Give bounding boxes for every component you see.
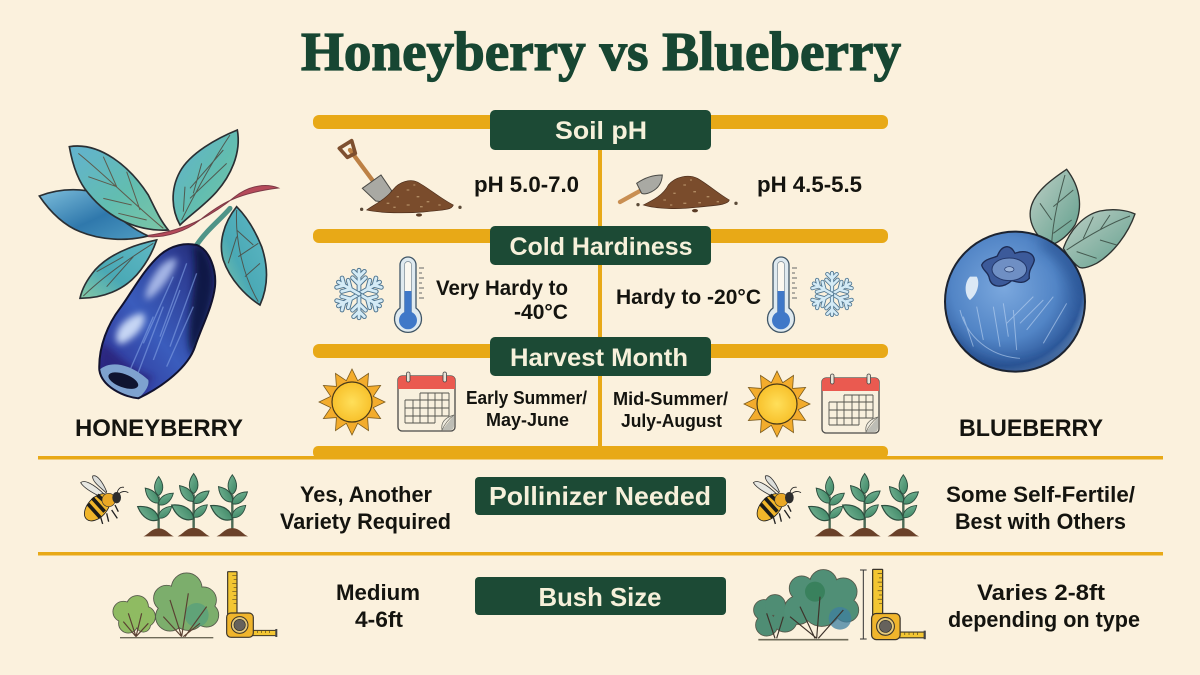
- section header: Harvest Month: Harvest Month: [510, 344, 688, 372]
- icon: bee, blueberry: [752, 476, 801, 526]
- text: blueberry cold hardiness: Hardy to -20°C: [616, 286, 761, 309]
- comparison table centre spine: [598, 150, 602, 448]
- icon: three plants, honeyberry: [135, 474, 250, 536]
- text: honeyberry soil pH: pH 5.0-7.0: [474, 172, 579, 197]
- text: blueberry bush size: depending on type: [948, 607, 1140, 632]
- text: honeyberry bush size: 4-6ft: [355, 607, 404, 632]
- stem: [197, 208, 230, 245]
- icon: calendar, blueberry: [822, 374, 879, 433]
- text: honeyberry cold hardiness: [436, 277, 568, 324]
- icon: trowel and soil, blueberry: [620, 175, 738, 212]
- text: honeyberry pollinizer: [280, 482, 451, 534]
- section header: Soil pH: Soil pH: [555, 117, 647, 145]
- icon: calendar, honeyberry: [398, 372, 455, 431]
- text: blueberry pollinizer: Best with Others: [955, 509, 1126, 534]
- icon: snowflake, blueberry: [811, 273, 853, 315]
- leaf: lower: [80, 240, 157, 298]
- leaf: right: [221, 207, 266, 305]
- illustration: honeyberry fruit with leaves: [39, 130, 278, 400]
- illustration: blueberry with leaves: [943, 169, 1135, 377]
- text: blueberry pollinizer: [946, 482, 1135, 534]
- fruit: [97, 244, 215, 400]
- icon: bushes, honeyberry: [113, 573, 218, 638]
- text: blueberry harvest month: Mid-Summer/: [613, 389, 728, 409]
- icon: thermometer, honeyberry: [394, 257, 424, 332]
- title: Honeyberry vs Blueberry: [301, 21, 901, 82]
- section header: Soil pH: [313, 110, 888, 150]
- leaf: upper left teal: [69, 146, 168, 230]
- icon: bushes, blueberry: [754, 570, 867, 640]
- text: honeyberry cold hardiness: -40°C: [514, 301, 568, 324]
- leaves: [1030, 169, 1080, 245]
- icon: snowflake, honeyberry: [335, 270, 383, 318]
- text: honeyberry pollinizer: Yes, Another: [300, 482, 432, 507]
- section header: Pollinizer Needed: [475, 477, 726, 515]
- text: blueberry bush size: [948, 580, 1140, 632]
- text: honeyberry bush size: [336, 580, 420, 632]
- label: honeyberry: HONEYBERRY: [75, 415, 243, 442]
- text: honeyberry harvest month: [466, 388, 587, 430]
- text: blueberry harvest month: July-August: [621, 411, 722, 431]
- section header: Pollinizer Needed: Pollinizer Needed: [489, 481, 711, 511]
- fruit highlights: [146, 258, 177, 300]
- text: honeyberry harvest month: May-June: [486, 410, 569, 430]
- section header: Bush Size: [475, 577, 726, 615]
- icon: tape measure, honeyberry: [227, 572, 277, 637]
- text: honeyberry cold hardiness: Very Hardy to: [436, 277, 568, 300]
- table bottom bar: [313, 446, 888, 458]
- icon: thermometer, blueberry: [768, 257, 797, 332]
- label: blueberry: BLUEBERRY: [959, 415, 1103, 442]
- icon: bee, honeyberry: [79, 476, 128, 526]
- text: blueberry soil pH: pH 4.5-5.5: [757, 172, 862, 197]
- section header: Cold Hardiness: [313, 226, 888, 265]
- section header: Cold Hardiness: Cold Hardiness: [510, 233, 692, 261]
- icon: tape measure, blueberry: [872, 569, 926, 640]
- section header: Harvest Month: [313, 337, 888, 376]
- icon: sun, honeyberry: [319, 369, 385, 435]
- berry: [945, 232, 1085, 372]
- text: blueberry bush size: Varies 2-8ft: [977, 580, 1106, 605]
- leaf: left blue: [39, 190, 148, 239]
- crown: [982, 247, 1034, 286]
- section header: Bush Size: Bush Size: [538, 582, 662, 612]
- icon: shovel and soil, honeyberry: [339, 141, 462, 217]
- leaf: top: [173, 130, 238, 225]
- icon: three plants, blueberry: [806, 474, 921, 536]
- text: honeyberry bush size: Medium: [336, 580, 420, 605]
- text: honeyberry harvest month: Early Summer/: [466, 388, 587, 408]
- text: blueberry harvest month: [613, 389, 728, 431]
- text: honeyberry pollinizer: Variety Required: [280, 509, 451, 534]
- divider lines: [38, 456, 1163, 556]
- icon: sun, blueberry: [744, 371, 810, 437]
- text: blueberry pollinizer: Some Self-Fertile/: [946, 482, 1135, 507]
